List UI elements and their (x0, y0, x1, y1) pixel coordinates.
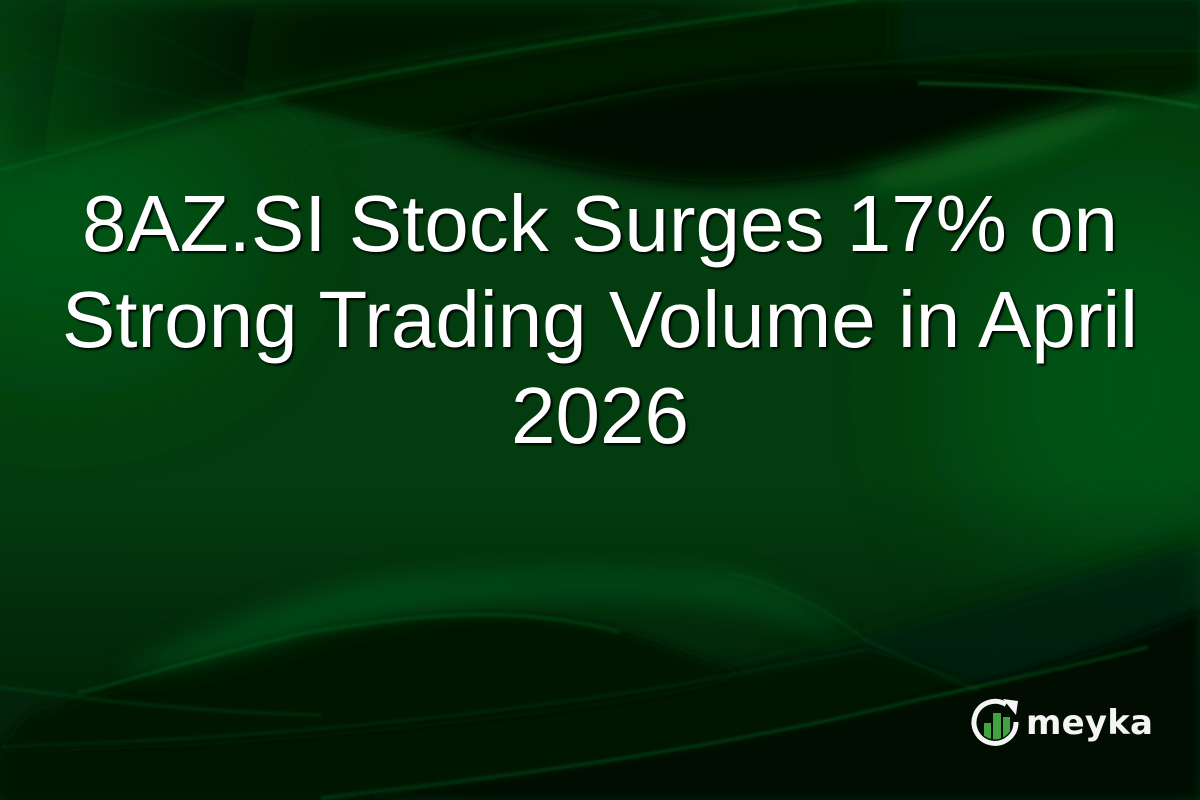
lower darkening (0, 480, 1200, 800)
top left fading dark (0, 0, 857, 170)
bottom right darkest region (321, 610, 1200, 800)
lighter ribbon above hump (120, 569, 850, 671)
soft glows (0, 100, 240, 360)
dark lens under second arc (440, 70, 1120, 182)
icon: circular arrow with bars (971, 698, 1018, 746)
logo: meyka (971, 698, 1153, 746)
dark hump (0, 615, 740, 750)
top right green ribbon (850, 97, 1148, 190)
title: 8AZ.SI Stock Surges 17% on Strong Trading Volume in April 2026 (62, 179, 1138, 460)
top right lighter corner (900, 0, 1200, 62)
logo wordmark: meyka (1026, 703, 1153, 743)
top dark mass (268, 0, 1200, 182)
bottom band between arcs (0, 540, 1200, 800)
